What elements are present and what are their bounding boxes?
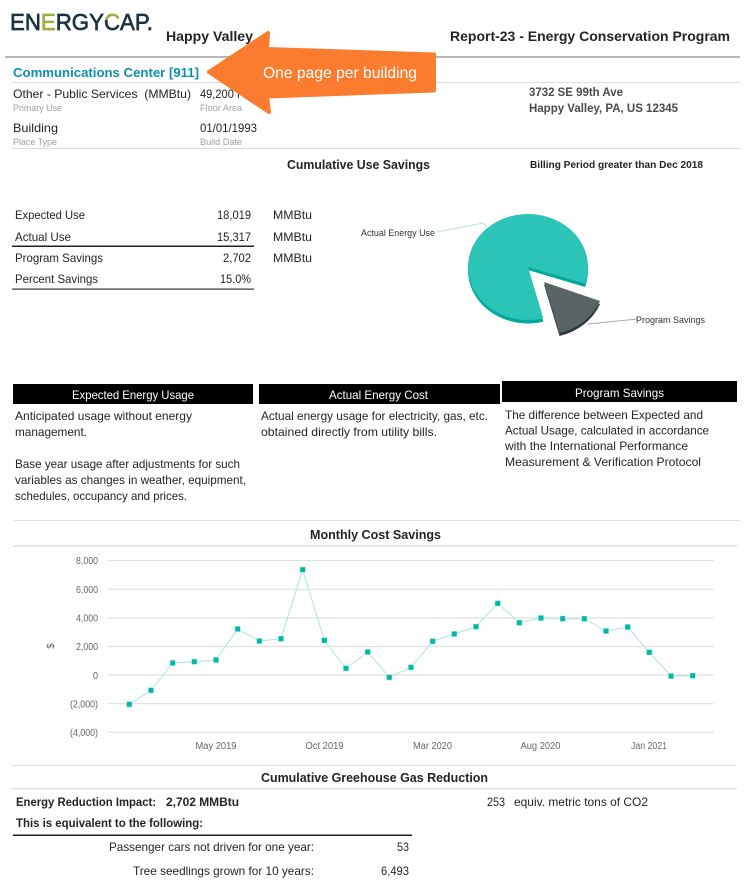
definition: program savings: Measurement & Verification Protocol bbox=[505, 455, 701, 469]
definition: expected energy usage: Expected Energy Usage bbox=[72, 388, 194, 402]
savings table: MMBtu bbox=[273, 208, 312, 222]
place name heading: Happy Valley bbox=[166, 28, 253, 44]
energy reduction impact: Energy Reduction Impact: bbox=[16, 795, 156, 809]
savings table: MMBtu bbox=[273, 251, 312, 265]
savings table: 18,019 bbox=[217, 208, 251, 222]
definition: program savings: Program Savings bbox=[575, 386, 664, 400]
callout arrow: one page per building: One page per building bbox=[263, 65, 417, 82]
heading: monthly cost savings: Monthly Cost Savings bbox=[310, 527, 441, 542]
pie chart: Program Savings bbox=[636, 315, 705, 326]
equivalents table: Tree seedlings grown for 10 years: bbox=[133, 864, 314, 878]
y axis labels: 2,000 bbox=[76, 642, 98, 653]
y axis labels: (2,000) bbox=[70, 700, 98, 710]
callout arrow: one page per building bbox=[209, 33, 434, 112]
y axis labels: (4,000) bbox=[70, 728, 98, 739]
definition: expected energy usage: variables as changes in weather, equipment, bbox=[15, 473, 246, 487]
x axis labels: Aug 2020 bbox=[520, 741, 561, 752]
pie slice: actual energy use bbox=[468, 214, 588, 323]
pie slice: program savings bbox=[544, 282, 600, 336]
y axis labels: 4,000 bbox=[76, 614, 98, 624]
building details bbox=[12, 82, 740, 149]
definition: expected energy usage bbox=[13, 384, 253, 503]
y axis title: $ bbox=[46, 643, 57, 649]
report title: Report-23 - Energy Conservation Program bbox=[450, 28, 730, 44]
equivalents table: 6,493 bbox=[381, 864, 409, 878]
definition: expected energy usage: Base year usage after adjustments for such bbox=[15, 457, 240, 471]
address: 3732 SE 99th Ave bbox=[529, 85, 623, 99]
equivalents table bbox=[13, 816, 412, 878]
energy reduction impact bbox=[16, 795, 239, 809]
savings table: Actual Use bbox=[15, 230, 71, 244]
definition: actual energy cost: Actual energy usage for electricity, gas, etc. bbox=[261, 409, 488, 423]
savings table bbox=[12, 208, 312, 290]
savings table: MMBtu bbox=[273, 230, 312, 244]
building details: Floor Area bbox=[200, 103, 242, 113]
building details: Primary Use bbox=[13, 103, 62, 113]
y axis labels: 6,000 bbox=[76, 585, 98, 596]
building details: Other - Public Services (MMBtu) bbox=[13, 87, 191, 101]
x axis labels: Oct 2019 bbox=[306, 741, 344, 752]
building details: Build Date bbox=[200, 137, 242, 147]
address: Happy Valley, PA, US 12345 bbox=[529, 101, 678, 115]
billing period note: Billing Period greater than Dec 2018 bbox=[530, 159, 703, 171]
x axis labels bbox=[196, 741, 667, 752]
building details: Building bbox=[13, 121, 58, 135]
building details: Place Type bbox=[13, 137, 57, 147]
building name: Communications Center [911] bbox=[13, 65, 199, 80]
equivalents table: Passenger cars not driven for one year: bbox=[109, 840, 314, 854]
savings table: 15,317 bbox=[217, 230, 251, 244]
y axis labels: 0 bbox=[93, 671, 98, 682]
pie chart bbox=[361, 214, 705, 336]
definition: program savings: Actual Usage, calculated in accordance bbox=[505, 424, 709, 438]
energy reduction impact: 2,702 MMBtu bbox=[166, 795, 239, 809]
equivalents table: This is equivalent to the following: bbox=[16, 816, 203, 830]
savings table: 2,702 bbox=[223, 251, 251, 265]
definition: actual energy cost bbox=[259, 384, 500, 439]
y axis labels bbox=[70, 556, 98, 739]
CO2 equivalent: equiv. metric tons of CO2 bbox=[514, 795, 648, 809]
pie chart: Actual Energy Use bbox=[361, 228, 435, 239]
CO2 equivalent: 253 bbox=[487, 795, 505, 809]
savings table: Expected Use bbox=[15, 208, 85, 222]
logo: EnergyCAP: ENERGYCAP. bbox=[10, 9, 153, 35]
heading: cumulative use savings: Cumulative Use Savings bbox=[287, 157, 430, 172]
building details: 01/01/1993 bbox=[200, 121, 257, 135]
header rule bbox=[5, 56, 740, 58]
address bbox=[529, 85, 678, 115]
equivalents table: 53 bbox=[397, 840, 409, 854]
savings table: Percent Savings bbox=[15, 272, 98, 286]
definition: expected energy usage: management. bbox=[15, 425, 87, 439]
y axis labels: 8,000 bbox=[76, 556, 98, 567]
definition: program savings: with the International Performance bbox=[504, 439, 688, 453]
building details: 49,200 f bbox=[200, 87, 241, 101]
definition: expected energy usage: Anticipated usage without energy bbox=[15, 409, 192, 423]
definition: program savings: The difference between Expected and bbox=[505, 408, 703, 422]
x axis labels: Mar 2020 bbox=[413, 741, 452, 752]
definition: expected energy usage: schedules, occupancy and prices. bbox=[15, 489, 187, 503]
data line bbox=[129, 570, 693, 704]
definition: actual energy cost: Actual Energy Cost bbox=[329, 388, 429, 402]
data markers bbox=[126, 567, 696, 707]
savings table: Program Savings bbox=[15, 251, 103, 265]
x axis labels: May 2019 bbox=[196, 741, 237, 752]
definition: program savings bbox=[502, 381, 737, 469]
x axis labels: Jan 2021 bbox=[631, 741, 667, 752]
definition: actual energy cost: obtained directly from utility bills. bbox=[261, 425, 437, 439]
heading: cumulative greenhouse gas reduction: Cumulative Greehouse Gas Reduction bbox=[261, 770, 488, 785]
savings table: 15.0% bbox=[220, 272, 251, 286]
line chart: monthly cost savings bbox=[13, 545, 737, 752]
